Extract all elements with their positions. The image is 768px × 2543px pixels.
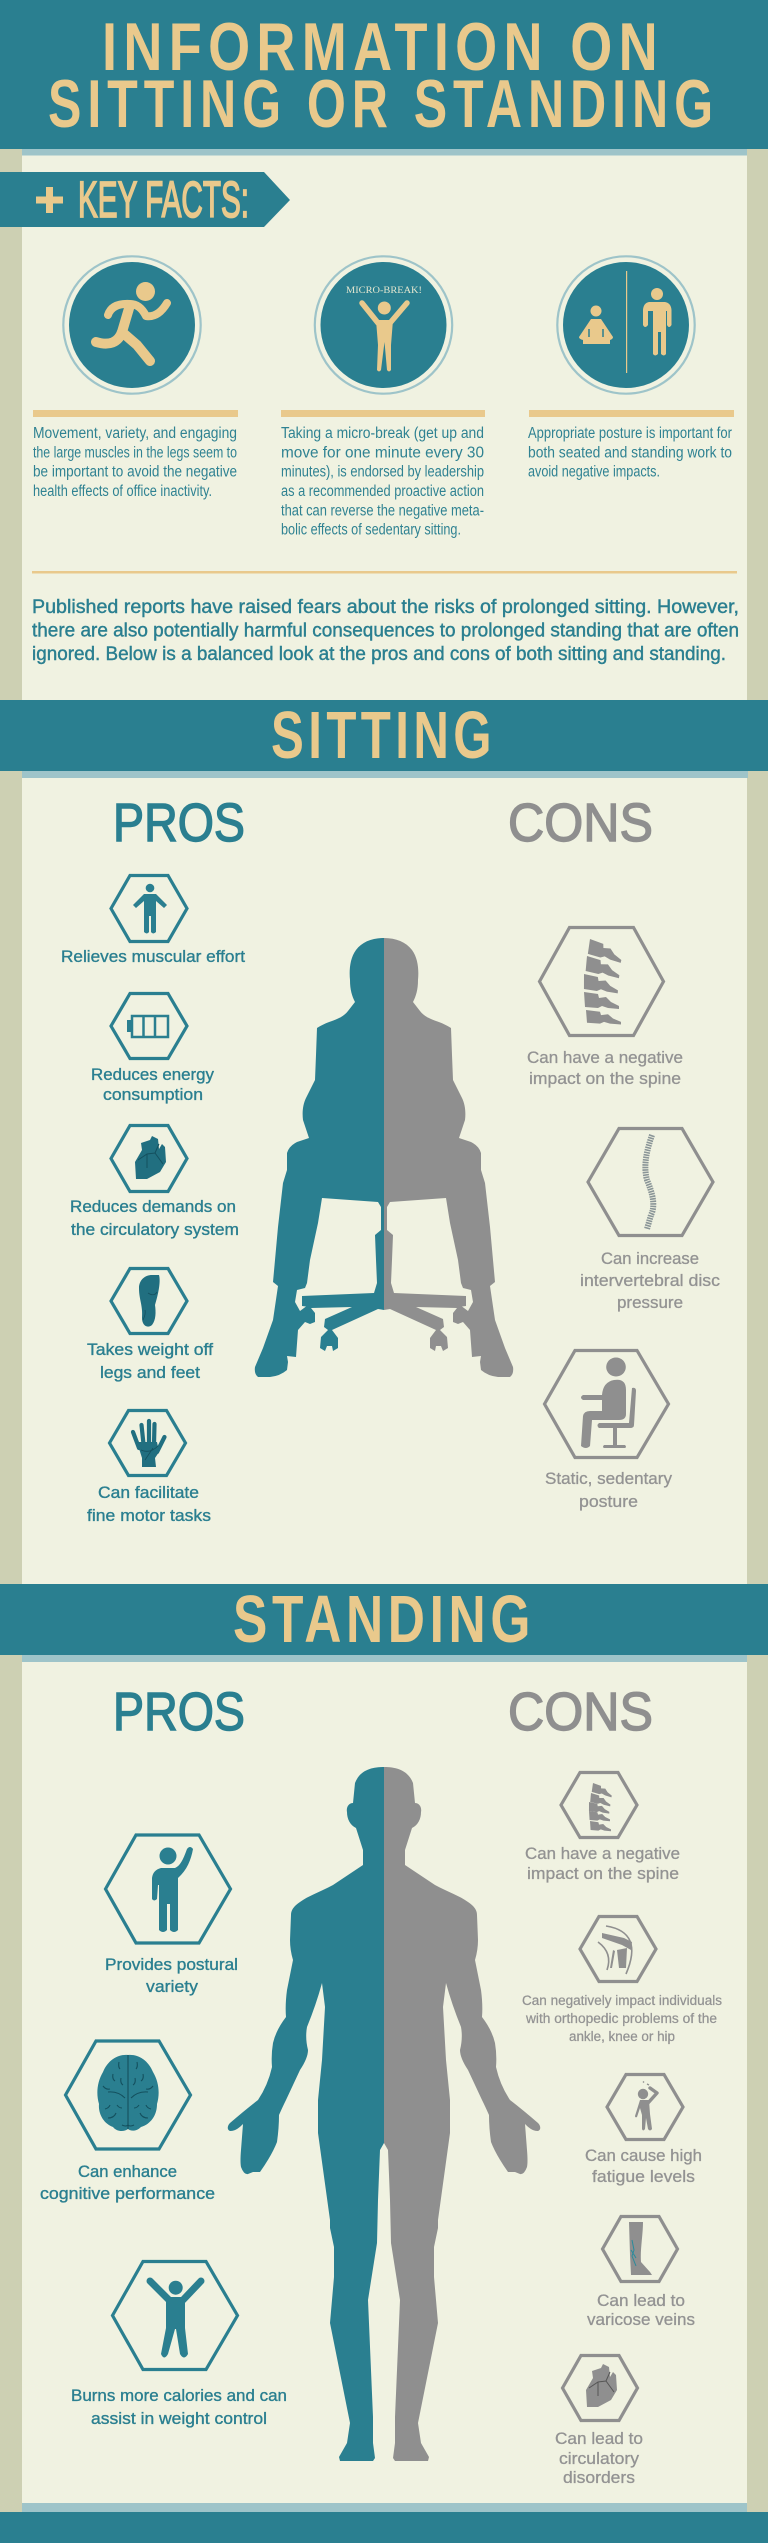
icon: person in hexagon	[111, 876, 187, 942]
heading: sitting pros: PROS	[113, 793, 245, 853]
sitting con: static sedentary posture: Static, sedentary	[545, 1469, 672, 1488]
standing con: varicose veins: varicose veins	[587, 2310, 695, 2329]
key facts arrow banner	[0, 171, 290, 228]
sitting pro: takes weight off legs and feet: legs and feet	[100, 1363, 200, 1382]
standing person silhouette, half teal half gray	[228, 1767, 540, 2461]
text: posture fact: avoid negative impacts.	[528, 464, 660, 481]
header banner with title	[0, 0, 768, 156]
icon: battery in hexagon	[111, 994, 187, 1058]
text: movement fact: the large muscles in the legs seem to	[33, 444, 237, 461]
icon: brain in hexagon	[66, 2041, 190, 2149]
sitting con: negative impact on the spine: Can have a negative	[527, 1048, 683, 1067]
footer band	[0, 2503, 768, 2543]
sitting pro: fine motor tasks	[87, 1410, 211, 1525]
standing con: high fatigue levels	[585, 2074, 702, 2186]
intro paragraph: Published reports have raised fears about the risks of prolonged sitting. However,	[32, 597, 739, 618]
sitting pro: reduces circulatory demands	[70, 1126, 239, 1239]
standing con: circulatory disorders: disorders	[563, 2468, 635, 2487]
sitting section band: SITTING	[271, 698, 496, 773]
icon: vertebrae in hexagon	[561, 1772, 637, 1838]
standing section band	[0, 1582, 768, 1662]
text: posture fact: both seated and standing work to	[528, 444, 732, 461]
sitting pro: fine motor tasks: fine motor tasks	[87, 1506, 211, 1525]
standing con: negative impact on the spine: Can have a negative	[525, 1844, 680, 1863]
standing con: circulatory disorders: circulatory	[559, 2449, 640, 2468]
icon: seated person in hexagon	[544, 1350, 668, 1458]
text: micro-break fact: as a recommended proactive action	[281, 483, 484, 500]
standing pro: cognitive performance	[40, 2041, 215, 2203]
standing pro: burns more calories	[71, 2262, 287, 2428]
icon: person with arms raised in hexagon	[112, 2262, 238, 2370]
standing section band: STANDING	[233, 1582, 535, 1657]
standing con: orthopedic problems	[522, 1916, 722, 2044]
standing con: circulatory disorders	[555, 2356, 643, 2487]
icon: foot in hexagon	[111, 1268, 187, 1334]
text: posture fact	[528, 425, 732, 481]
text: movement fact: health effects of office inactivity.	[33, 483, 212, 500]
icon: heart in hexagon	[111, 1126, 187, 1192]
standing con: high fatigue levels: fatigue levels	[592, 2167, 695, 2186]
standing con: high fatigue levels: Can cause high	[585, 2146, 702, 2165]
standing pro: burns more calories: Burns more calories and can	[71, 2386, 287, 2405]
standing pro: postural variety: Provides postural	[105, 1955, 238, 1974]
sitting con: intervertebral disc pressure: Can increase	[601, 1249, 699, 1268]
icon: leg with veins in hexagon	[602, 2216, 678, 2282]
sitting pro: reduces circulatory demands: the circulatory system	[71, 1220, 239, 1239]
standing con: circulatory disorders: Can lead to	[555, 2429, 643, 2448]
sitting pro: reduces circulatory demands: Reduces demands on	[70, 1197, 236, 1216]
sitting con: static sedentary posture: posture	[579, 1492, 638, 1511]
standing con: orthopedic problems: ankle, knee or hip	[569, 2029, 675, 2044]
standing con: orthopedic problems: with orthopedic problems of the	[525, 2011, 717, 2026]
sitting con: static sedentary posture	[544, 1350, 672, 1511]
sitting con: intervertebral disc pressure	[580, 1128, 721, 1312]
standing pro: postural variety	[105, 1835, 238, 1996]
standing pro: burns more calories: assist in weight control	[91, 2409, 267, 2428]
key fact: micro-break	[281, 256, 485, 539]
sitting con: negative impact on the spine: impact on the spine	[529, 1069, 681, 1088]
sitting pro: relieves muscular effort	[61, 876, 245, 966]
icon: person raising arm in hexagon	[106, 1835, 230, 1943]
text: micro-break fact: minutes), is endorsed by leadership	[281, 464, 484, 481]
sitting pro: relieves muscular effort: Relieves muscular effort	[61, 947, 245, 966]
icon: knee joint in hexagon	[580, 1916, 656, 1982]
standing con: orthopedic problems: Can negatively impact individuals	[522, 1993, 722, 2008]
text: movement fact: be important to avoid the negative	[33, 464, 237, 481]
text: posture fact: Appropriate posture is important for	[528, 425, 732, 442]
sitting pro: reduces energy consumption	[91, 994, 214, 1104]
standing pro: postural variety: variety	[146, 1977, 199, 1996]
sitting pro: fine motor tasks: Can facilitate	[98, 1483, 199, 1502]
standing con: negative impact on the spine: impact on the spine	[527, 1864, 679, 1883]
text: movement fact: Movement, variety, and engaging	[33, 425, 237, 442]
intro paragraph: ignored. Below is a balanced look at the pros and cons of both sitting and standing.	[32, 644, 726, 665]
standing pro: cognitive performance: Can enhance	[78, 2162, 177, 2181]
heading: standing cons: CONS	[508, 1682, 653, 1742]
standing pro: cognitive performance: cognitive performance	[40, 2184, 215, 2203]
icon: micro-break person in circle	[315, 256, 452, 394]
text: micro-break fact: move for one minute every 30	[281, 444, 484, 461]
icon: vertebrae in hexagon	[540, 928, 664, 1036]
seated person silhouette, half teal half gray	[255, 938, 513, 1377]
sitting pro: takes weight off legs and feet: Takes weight off	[87, 1340, 213, 1359]
sitting section band	[0, 698, 768, 778]
sitting pro: reduces energy consumption: Reduces energy	[91, 1065, 214, 1084]
icon: hand in hexagon	[110, 1410, 186, 1476]
sitting con: intervertebral disc pressure: pressure	[617, 1293, 683, 1312]
text: micro-break fact: bolic effects of sedentary sitting.	[281, 522, 461, 539]
text: movement fact	[33, 425, 237, 500]
standing con: varicose veins	[587, 2216, 695, 2329]
sitting pro: reduces energy consumption: consumption	[103, 1085, 203, 1104]
key fact: posture	[528, 256, 734, 481]
icon: seated and standing figures in circle	[557, 256, 695, 394]
text: micro-break fact: that can reverse the negative meta-	[281, 502, 484, 519]
sitting pro: takes weight off legs and feet	[87, 1268, 213, 1382]
heading: sitting cons: CONS	[508, 793, 653, 853]
standing con: negative impact on the spine	[525, 1772, 680, 1883]
sitting con: negative impact on the spine	[527, 928, 683, 1088]
icon: running person in circle	[63, 256, 201, 394]
standing con: varicose veins: Can lead to	[597, 2291, 685, 2310]
icon: tired person in hexagon	[607, 2074, 683, 2140]
key fact: movement	[33, 256, 238, 500]
heading: standing pros: PROS	[113, 1682, 245, 1742]
sitting con: intervertebral disc pressure: intervertebral disc	[580, 1271, 721, 1290]
icon: spine column in hexagon	[588, 1128, 713, 1236]
intro paragraph: there are also potentially harmful consequences to prolonged standing that are often	[32, 621, 739, 642]
icon: micro-break person in circle: MICRO-BREAK!	[346, 286, 422, 296]
icon: heart in hexagon	[562, 2356, 638, 2420]
text: micro-break fact: Taking a micro-break (get up and	[281, 425, 484, 442]
text: micro-break fact	[281, 425, 484, 539]
intro paragraph	[32, 597, 739, 665]
key facts arrow banner: KEY FACTS:	[78, 171, 249, 228]
